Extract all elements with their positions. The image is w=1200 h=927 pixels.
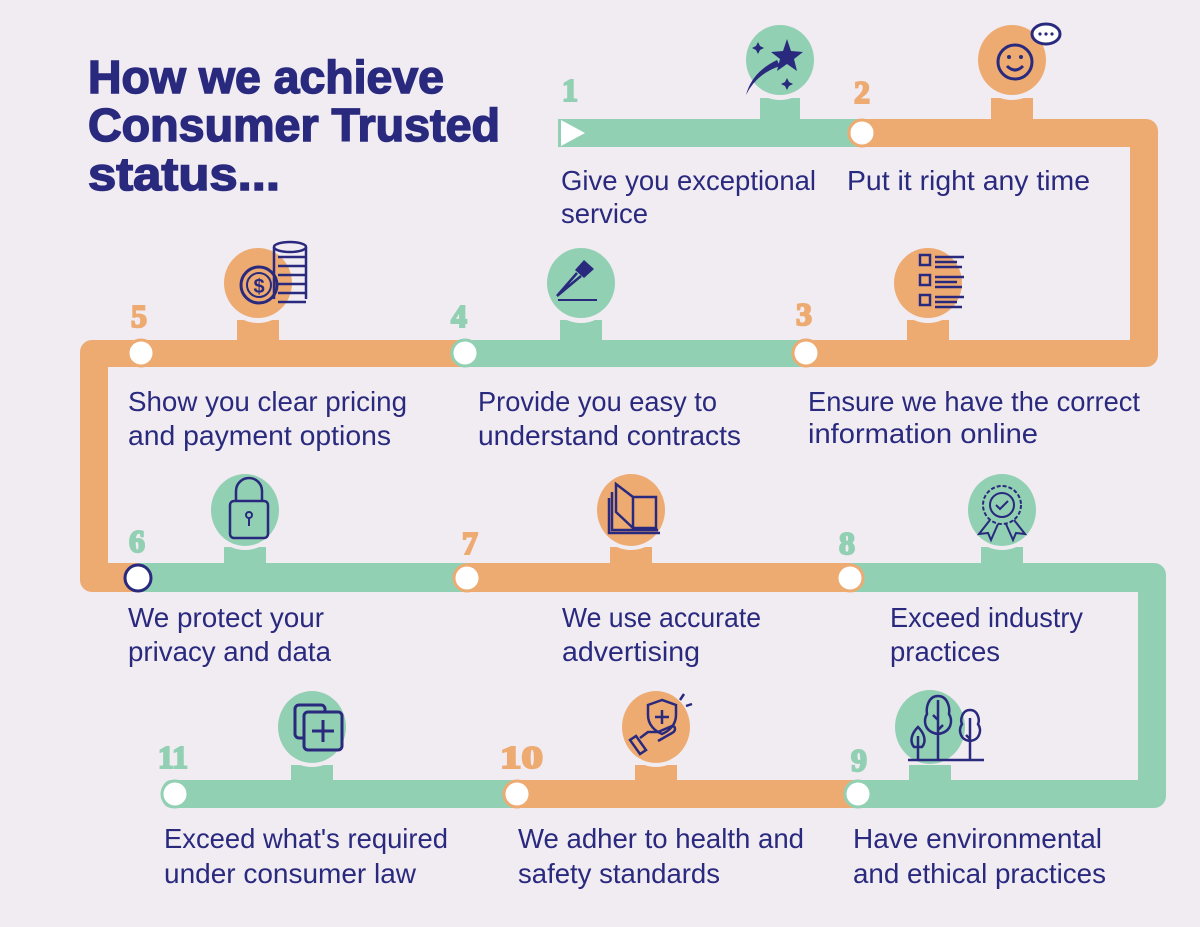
text 11: Exceed what's required [164,823,448,854]
step numbers: 9 [851,742,867,778]
text 9 [853,823,1106,889]
icon 9: trees [895,690,984,781]
text 6 [128,602,331,667]
title: status... [88,148,280,200]
text 1: service [561,198,648,229]
title [88,51,500,200]
text 5: and payment options [128,420,391,451]
title: How we achieve [88,51,444,103]
text 3: Ensure we have the correct [808,386,1140,417]
icon 4: pen [544,243,618,341]
text 3 [808,386,1140,449]
step numbers: 6 [129,523,145,559]
icon 5: coins [221,242,306,341]
text 10 [518,823,804,889]
icon 5: coins: $ [253,276,265,298]
step numbers: 1 [562,72,578,108]
step numbers: 7 [462,525,478,561]
text 1 [561,165,816,229]
icon 6: padlock [208,470,282,564]
icon 2: smiley [975,20,1060,120]
step numbers: 11 [158,739,188,775]
text 3: information online [808,418,1038,449]
text 11 [164,823,448,889]
text 4 [478,386,741,451]
title: Consumer Trusted [88,99,500,151]
text 2: Put it right any time [847,165,1090,196]
step numbers [129,72,870,778]
text 9: and ethical practices [853,858,1106,889]
step numbers: 3 [796,296,812,332]
text 8: Exceed industry [890,602,1083,633]
text 6: We protect your [128,602,324,633]
text 10: We adher to health and [518,823,804,854]
icon 1: shooting star [743,20,817,120]
nodes [125,120,875,807]
step numbers: 8 [839,525,855,561]
text 7 [562,602,761,667]
icon 7: book [594,470,668,564]
text 1: Give you exceptional [561,165,816,196]
text 7: advertising [562,636,700,667]
text 5: Show you clear pricing [128,386,407,417]
track path [80,119,1166,808]
step numbers: 2 [854,74,870,110]
text 9: Have environmental [853,823,1102,854]
text 5 [128,386,407,451]
step numbers: 4 [451,298,467,334]
text 8 [890,602,1083,667]
text 7: We use accurate [562,602,761,633]
step numbers: 5 [131,298,147,334]
text 4: Provide you easy to [478,386,717,417]
text 6: privacy and data [128,636,331,667]
icon 8: award [965,470,1039,564]
icon 3: checklist [891,243,965,341]
icon 11: add copy [275,687,349,781]
icon 10: health hand [619,687,693,781]
step numbers: 10 [500,739,543,775]
text 8: practices [890,636,1000,667]
text 11: under consumer law [164,858,417,889]
text 10: safety standards [518,858,720,889]
text 4: understand contracts [478,420,741,451]
